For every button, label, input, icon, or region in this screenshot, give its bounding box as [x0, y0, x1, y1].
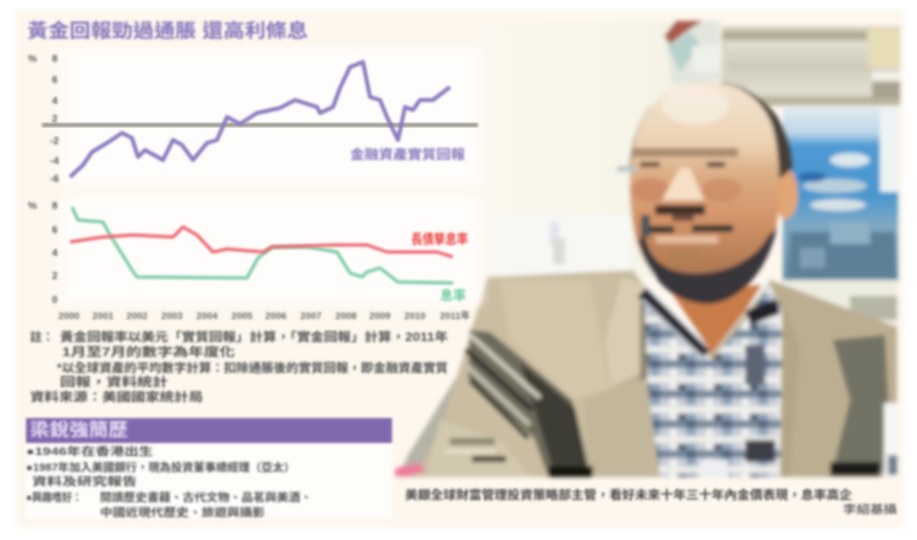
y-axis labels: 4 [52, 96, 58, 107]
photo: office wall [470, 22, 720, 278]
photo: blue landscape painting [783, 107, 898, 282]
photo: desk ornaments [550, 222, 565, 264]
profile text [26, 444, 312, 519]
photo: shelf [722, 26, 900, 106]
photo: flag in the background [664, 21, 722, 84]
y-axis labels: 0 [52, 295, 58, 306]
photo: beard [638, 228, 777, 304]
chart notes [30, 329, 448, 404]
y-axis labels: -4 [50, 156, 59, 167]
x-axis labels: 2007 [300, 311, 322, 322]
zero baseline [42, 123, 478, 127]
chart background [62, 50, 482, 185]
profile text: 中國近現代歷史、旅遊與攝影 [100, 505, 265, 519]
photo: neck [670, 285, 762, 354]
photo: cuff wrinkles [425, 420, 530, 477]
photo: hair [720, 82, 793, 180]
photo: face [630, 82, 779, 300]
profile text: 閱讀歷史書籍、古代文物、品茗與美酒、 [100, 490, 312, 504]
x-axis labels: 2005 [231, 311, 253, 322]
photo: white chart area behind desk items [490, 215, 630, 275]
photo credit: 李紹基攝 [843, 502, 897, 516]
photo: pink object at lower left corner [394, 463, 425, 477]
profile text: ●1987年加入美國銀行，現為投資董事總經理（亞太） [26, 460, 295, 474]
y-axis labels: % [28, 54, 37, 65]
photo: shirt collar [642, 282, 778, 356]
x-axis labels: 2010 [404, 311, 426, 322]
profile heading: 梁銳強簡歷 [30, 419, 128, 440]
chart notes: 註： [30, 329, 54, 344]
x-axis labels: 2004 [196, 311, 218, 322]
photo: sleeve folds and shadows [425, 330, 897, 477]
profile text: ●興趣嗜好： [26, 490, 82, 504]
y-axis labels [28, 54, 59, 185]
profile body background [26, 443, 392, 519]
line chart: interest rates [28, 196, 482, 322]
photo: wall strip right of shoulder [780, 280, 897, 330]
line chart: gold return [28, 50, 482, 185]
chart notes: *以全球資產的平均數字計算：扣除通脹後的實質回報，即金融資產實質 [57, 360, 448, 375]
profile panel [26, 418, 392, 519]
y-axis labels: -6 [50, 174, 59, 185]
photo: interviewee in office [394, 21, 900, 477]
x-axis labels: 2011年 [440, 310, 471, 322]
y-axis labels [28, 201, 58, 306]
x-axis labels: 2000 [58, 311, 80, 322]
photo: head [617, 82, 798, 304]
photo: facial features [617, 85, 742, 260]
photo: grey sleeve edge [397, 360, 480, 477]
chart notes: 1月至7月的數字為年度化 [62, 344, 235, 359]
x-axis labels: 2002 [126, 311, 148, 322]
y-axis labels: 2 [52, 114, 58, 125]
x-axis labels: 2006 [265, 311, 287, 322]
y-axis labels: 2 [52, 271, 58, 282]
photo: checked shirt [642, 282, 782, 477]
title: 黃金回報勁過通脹 還高利條息 [27, 19, 308, 42]
purple line label: 金融資產實質回報 [350, 147, 465, 162]
profile heading bar [26, 418, 392, 443]
y-axis labels: 4 [52, 248, 58, 259]
green line [72, 207, 453, 283]
photo: suit jacket [397, 270, 897, 477]
x-axis labels: 2008 [335, 311, 357, 322]
chart notes: 資料來源：美國國家統計局 [30, 389, 203, 404]
chart notes: 黃金回報率以美元「實質回報」計算，「實金回報」計算，2011年 [60, 329, 448, 344]
y-axis labels: -2 [50, 136, 59, 147]
red line label: 長債孳息率 [411, 231, 468, 247]
y-axis labels: 8 [52, 54, 58, 65]
green line label: 息率 [440, 288, 466, 303]
red line [70, 227, 453, 257]
y-axis labels: 6 [52, 225, 58, 236]
x-axis labels [58, 310, 471, 322]
y-axis labels: 6 [52, 75, 58, 86]
photo: ear [774, 169, 798, 219]
photo caption: 美銀全球財富管理投資策略部主管，看好未來十年三十年內金價表現，息率高企 [405, 487, 852, 502]
chart background [62, 196, 482, 304]
y-axis labels: 8 [52, 201, 58, 212]
profile text: ●1946年在香港出生 [26, 444, 153, 458]
x-axis labels: 2009 [369, 311, 391, 322]
x-axis labels: 2001 [92, 311, 114, 322]
profile text: 資料及研究報告 [32, 474, 137, 488]
y-axis labels: % [28, 201, 37, 212]
purple line [70, 62, 450, 177]
x-axis labels: 2003 [161, 311, 183, 322]
chart notes: 回報，資料統計 [60, 374, 168, 389]
